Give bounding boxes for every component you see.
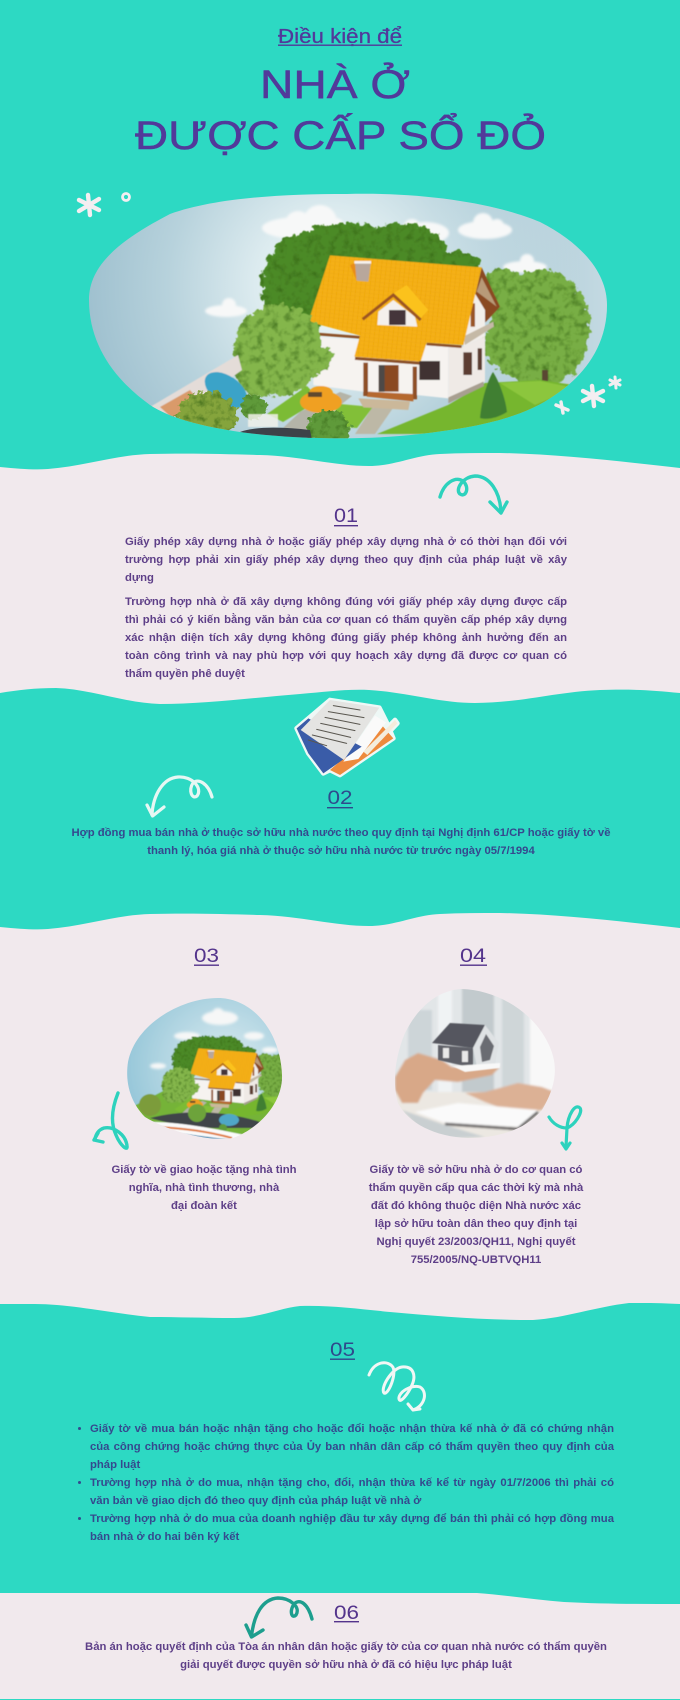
text block: section 3: nghĩa, nhà tình thương, nhà xyxy=(129,1182,279,1194)
icon: documents and pen xyxy=(297,700,397,775)
heading: 01: 01 xyxy=(334,506,358,527)
main house photo blob xyxy=(85,190,615,446)
text block: section 2 xyxy=(72,827,610,857)
heading: 05: 05 xyxy=(330,1340,355,1361)
heading: 04: 04 xyxy=(460,946,487,967)
text block: section 4: Nghị quyết 23/2003/QH11, Nghị quyết xyxy=(376,1236,576,1248)
heading: 06: 06 xyxy=(334,1603,359,1624)
panel: sections 3 and 4 light wave band xyxy=(0,913,680,1320)
text block: section 1: thì phải có ý kiến bằng văn bản của cơ quan có thẩm quyền cấp phép xây dựng xyxy=(125,614,567,626)
heading: 02: 02 xyxy=(328,788,352,809)
arrow: section 4 xyxy=(549,1107,581,1149)
icon: small ring xyxy=(122,194,130,200)
arrow: section 6 xyxy=(246,1598,312,1637)
text block: section 3: Giấy tờ về giao hoặc tặng nhà tình xyxy=(111,1164,297,1176)
image: small house blob xyxy=(127,998,282,1139)
text block: section 4: lập sở hữu toàn dân theo quy định tại xyxy=(375,1218,577,1230)
heading: 03: 03 xyxy=(194,946,219,967)
text block: section 1: xác nhận diện tích xây dựng không đúng giấy phép không ảnh hưởng đến an xyxy=(125,632,567,644)
text block: section 1: Giấy phép xây dựng nhà ở hoặc giấy phép xây dựng nhà ở có thời hạn đối với xyxy=(125,536,567,548)
text block: section 4: đất đó không thuộc diện Nhà nước xác xyxy=(371,1200,581,1212)
text block: section 3: đại đoàn kết xyxy=(171,1200,237,1212)
text block: section 1 xyxy=(125,536,567,680)
text block: section 5 list: Trường hợp nhà ở do mua, nhận tặng cho, đổi, nhận thừa kế kể từ ngày 01/7/2006 thì phải có xyxy=(90,1477,614,1489)
text block: section 4: Giấy tờ về sở hữu nhà ở do cơ quan có xyxy=(370,1164,582,1176)
title small heading: Điều kiện để xyxy=(278,26,402,48)
icon: bottom right sparkles xyxy=(556,377,620,413)
text block: section 5 list: bán nhà ở do hai bên ký kết xyxy=(90,1531,239,1543)
text block: section 5 list: của công chứng hoặc chứng thực của Ủy ban nhân dân cấp có thẩm quyền theo quy định của xyxy=(90,1441,614,1453)
text block: section 4: 755/2005/NQ-UBTVQH11 xyxy=(411,1254,541,1266)
text block: section 5 list: Trường hợp nhà ở do mua của doanh nghiệp đầu tư xây dựng để bán thì phải có hợp đồng mua xyxy=(90,1513,614,1525)
text block: section 5 list xyxy=(78,1423,614,1543)
title line 2: ĐƯỢC CẤP SỔ ĐỎ xyxy=(135,111,546,158)
text block: section 1: toàn công trình và nay phù hợp với quy hoạch xây dựng đã được cơ quan có xyxy=(125,650,567,662)
text block: section 1: trường hợp phải xin giấy phép xây dựng theo quy định của pháp luật về xây xyxy=(125,554,567,566)
text block: section 4 xyxy=(368,1164,584,1266)
text block: section 3 xyxy=(111,1164,297,1212)
text block: section 6: giải quyết được quyền sở hữu nhà ở đã có hiệu lực pháp luật xyxy=(180,1659,512,1671)
arrow: section 5 curl xyxy=(369,1363,424,1410)
image: hands holding house blob xyxy=(395,989,555,1138)
text block: section 4: thẩm quyền cấp qua các thời kỳ mà nhà xyxy=(369,1182,583,1194)
text block: section 1: Trường hợp nhà ở đã xây dựng không đúng với giấy phép xây dựng được cấp xyxy=(125,596,567,608)
title line 1: NHÀ Ở xyxy=(260,61,410,107)
text block: section 6 xyxy=(85,1641,607,1671)
arrow: section 1 xyxy=(440,476,507,513)
text block: section 1: thẩm quyền phê duyệt xyxy=(125,668,245,680)
icon: top left sparkle xyxy=(79,195,99,215)
text block: section 2: thanh lý, hóa giá nhà ở thuộc sở hữu nhà nước từ trước ngày 05/7/1994 xyxy=(147,845,535,857)
arrow: section 2 xyxy=(147,777,212,816)
text block: section 2: Hợp đồng mua bán nhà ở thuộc sở hữu nhà nước theo quy định tại Nghị định 61/CP hoặc giấy tờ về xyxy=(72,827,610,839)
panel: section 6 light band xyxy=(0,1593,680,1699)
panel: section 1 light wave band xyxy=(0,453,680,704)
text block: section 5 list: pháp luật xyxy=(90,1459,140,1471)
text block: section 5 list: văn bản về giao dịch đó theo quy định của pháp luật về nhà ở xyxy=(90,1495,421,1507)
arrow: section 3 xyxy=(94,1093,127,1148)
text block: section 1: dựng xyxy=(125,572,154,584)
text block: section 6: Bản án hoặc quyết định của Tòa án nhân dân hoặc giấy tờ của cơ quan nhà nước có thẩm quyền xyxy=(85,1641,607,1653)
text block: section 5 list: Giấy tờ về mua bán hoặc nhận tặng cho hoặc đổi hoặc nhận thừa kế nhà ở đã có chứng nhận xyxy=(90,1423,614,1435)
